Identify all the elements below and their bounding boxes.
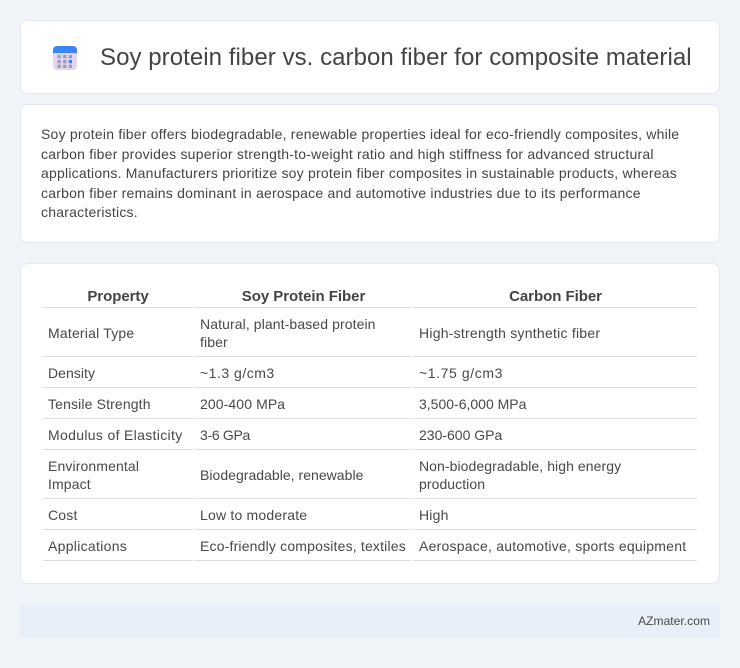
row: cost: Low to moderate xyxy=(200,507,307,523)
row: material type: Material Type xyxy=(48,325,134,341)
row: density xyxy=(48,365,503,381)
row: cost: High xyxy=(419,507,449,523)
row: tensile strength: 200-400 MPa xyxy=(200,396,285,412)
row: material type: fiber xyxy=(200,334,228,350)
intro paragraph: carbon fiber remains dominant in aerospace and automotive industries due to its performance xyxy=(41,184,641,200)
row: material type: High-strength synthetic fiber xyxy=(419,325,600,341)
table header xyxy=(87,288,602,305)
row: cost: Cost xyxy=(48,507,78,523)
row: modulus of elasticity: Modulus of Elasticity xyxy=(48,427,183,443)
footer bar xyxy=(20,604,720,638)
row: environmental impact: Environmental xyxy=(48,458,139,474)
table header: Soy Protein Fiber xyxy=(242,288,365,305)
footer credit: AZmater.com xyxy=(638,614,710,628)
intro paragraph: Soy protein fiber offers biodegradable, renewable properties ideal for eco-friendly composites, while xyxy=(41,126,679,142)
title: Soy protein fiber vs. carbon fiber for composite material xyxy=(100,44,692,71)
row: tensile strength: 3,500-6,000 MPa xyxy=(419,396,526,412)
panel: intro text xyxy=(20,104,720,243)
row: material type xyxy=(48,316,600,350)
intro paragraph: applications. Manufacturers prioritize soy protein fiber composites in sustainable products, whereas xyxy=(41,165,677,181)
row: density: ~1.3 g/cm3 xyxy=(200,365,275,381)
icon: calendar xyxy=(53,46,77,70)
row: environmental impact xyxy=(48,458,622,492)
row: applications: Eco-friendly composites, textiles xyxy=(200,538,406,554)
intro paragraph: carbon fiber provides superior strength-to-weight ratio and high stiffness for advanced structural xyxy=(41,146,654,162)
row: cost xyxy=(48,507,449,523)
row: tensile strength: Tensile Strength xyxy=(48,396,151,412)
row: environmental impact: Non-biodegradable, high energy xyxy=(419,458,621,474)
row: density: Density xyxy=(48,365,95,381)
row: applications: Applications xyxy=(48,538,127,554)
row: tensile strength xyxy=(48,396,526,412)
comparison table xyxy=(43,288,697,561)
title panel xyxy=(20,20,720,94)
table header: Carbon Fiber xyxy=(509,288,602,305)
row: applications: Aerospace, automotive, sports equipment xyxy=(419,538,686,554)
panel: comparison table xyxy=(20,263,720,584)
row: environmental impact: Impact xyxy=(48,476,91,492)
intro paragraph xyxy=(41,126,679,220)
row: modulus of elasticity: 230-600 GPa xyxy=(419,427,502,443)
row: environmental impact: Biodegradable, renewable xyxy=(200,467,363,483)
row: modulus of elasticity: 3-6 GPa xyxy=(200,427,250,443)
intro paragraph: characteristics. xyxy=(41,204,138,220)
row: material type: Natural, plant-based protein xyxy=(200,316,376,332)
row: environmental impact: production xyxy=(419,476,485,492)
row: modulus of elasticity xyxy=(48,427,502,443)
table header: Property xyxy=(87,288,149,305)
row: density: ~1.75 g/cm3 xyxy=(419,365,503,381)
row: applications xyxy=(48,538,686,554)
